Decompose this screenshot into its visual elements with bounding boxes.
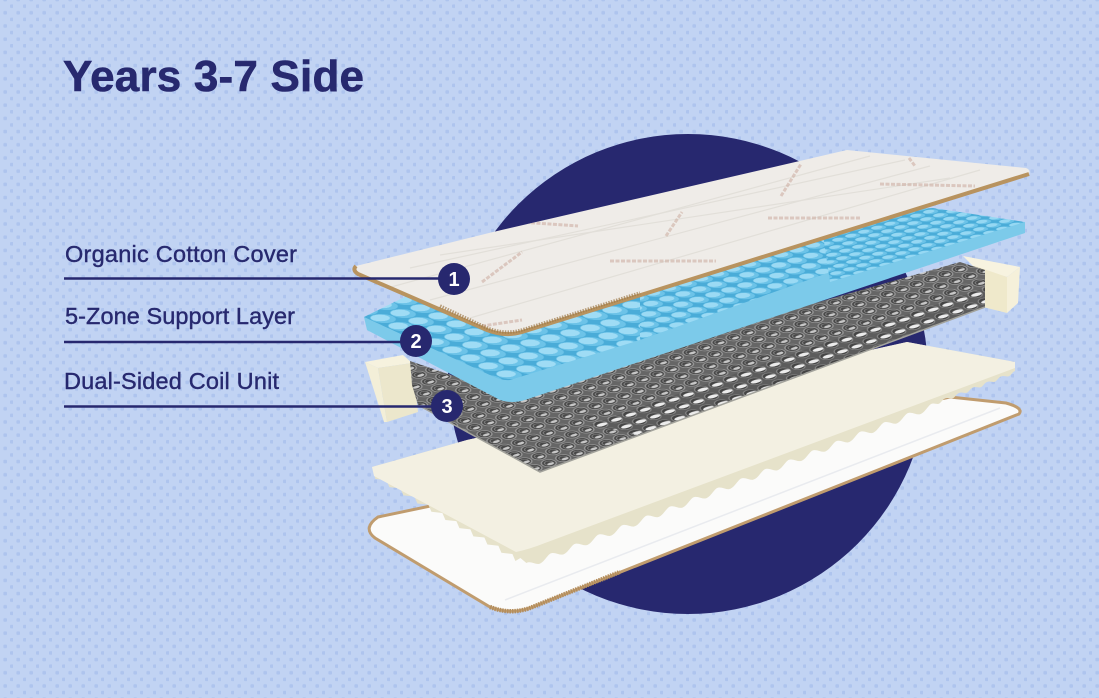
layer: blue support foam: [364, 208, 1025, 402]
navy circle backdrop: [448, 134, 928, 614]
layer: organic cotton cover: [354, 150, 1030, 334]
badge 3: 3: [441, 396, 453, 418]
badge 1: [438, 263, 470, 295]
layer: bottom cover: [369, 397, 1020, 611]
layer: dual-sided coil unit: [410, 262, 985, 472]
badge 2: [400, 325, 432, 357]
label: 5-Zone Support Layer: 5-Zone Support Layer: [65, 303, 295, 329]
mattress exploded view: [354, 150, 1030, 611]
title: Years 3-7 Side: [63, 52, 364, 101]
badge 3: [431, 390, 463, 422]
layer: right foam block: [963, 256, 1020, 313]
label: Organic Cotton Cover: [64, 241, 470, 295]
label: Organic Cotton Cover: Organic Cotton Cover: [65, 241, 297, 267]
label: Dual-Sided Coil Unit: [64, 368, 463, 422]
label: Dual-Sided Coil Unit: Dual-Sided Coil Unit: [64, 368, 279, 394]
badge 1: 1: [448, 269, 460, 291]
label: 5-Zone Support Layer: [64, 303, 432, 357]
badge 2: 2: [410, 331, 422, 353]
layer: left foam block: [365, 355, 418, 422]
layer: cream foam with scalloped edge: [372, 342, 1015, 564]
